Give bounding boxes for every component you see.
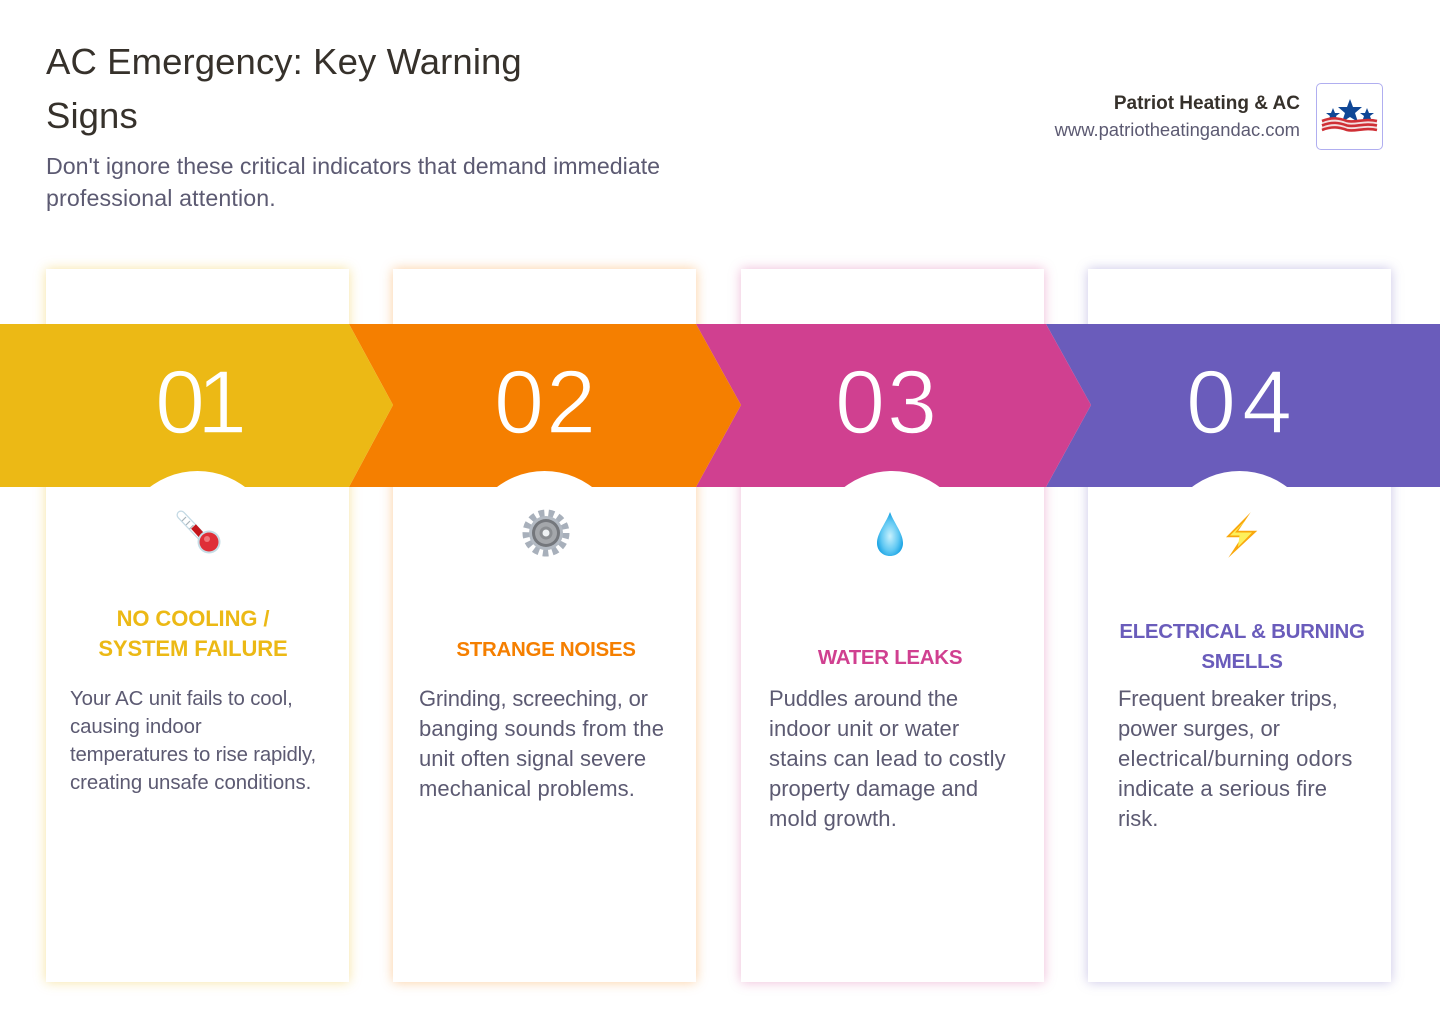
card 4 description: Frequent breaker trips, <box>1118 686 1338 711</box>
card 1 heading: NO COOLING / <box>117 606 269 631</box>
card 1 description: temperatures to rise rapidly, <box>70 744 316 766</box>
company name and website <box>1054 93 1300 140</box>
card 1 description: creating unsafe conditions. <box>70 772 311 794</box>
panel: card 1 background <box>46 269 349 982</box>
number 03: 03 <box>835 353 939 453</box>
card 3 description: mold growth. <box>769 806 897 831</box>
icon: lightning bolt <box>1226 512 1258 558</box>
panel: card 2 background <box>393 269 696 982</box>
card 4 description: indicate a serious fire <box>1118 776 1327 801</box>
card 2 description <box>419 686 664 801</box>
card 2 description: banging sounds from the <box>419 716 664 741</box>
card 1 description: causing indoor <box>70 716 202 738</box>
icon: water drop <box>877 512 903 556</box>
card 1 description <box>70 688 316 794</box>
panel: card 4 background <box>1088 269 1391 982</box>
header: subtitle <box>46 153 660 211</box>
card 1 heading: SYSTEM FAILURE <box>98 636 288 661</box>
number 01: 01 <box>155 353 239 453</box>
card 4 description <box>1118 686 1353 831</box>
card 3 description: Puddles around the <box>769 686 958 711</box>
card 1 heading <box>98 606 288 661</box>
card 4 description: electrical/burning odors <box>1118 746 1353 771</box>
panel: card 3 background <box>741 269 1044 982</box>
icon: thermometer <box>176 510 220 554</box>
header: title: AC Emergency: Key Warning <box>46 41 522 82</box>
card 1 description: Your AC unit fails to cool, <box>70 688 293 710</box>
company name and website: Patriot Heating & AC <box>1114 93 1300 114</box>
card 3 description: indoor unit or water <box>769 716 959 741</box>
card 3 description: property damage and <box>769 776 978 801</box>
card 4 description: power surges, or <box>1118 716 1280 741</box>
header: title <box>46 41 522 136</box>
card 4 heading: SMELLS <box>1201 650 1283 673</box>
header: subtitle: professional attention. <box>46 185 276 211</box>
card 2 description: mechanical problems. <box>419 776 635 801</box>
number 04: 04 <box>1186 353 1298 453</box>
header: subtitle: Don't ignore these critical indicators that demand immediate <box>46 153 660 179</box>
header: title: Signs <box>46 95 138 136</box>
card 2 heading: STRANGE NOISES <box>456 638 636 661</box>
company logo <box>1316 83 1383 150</box>
card 4 heading <box>1119 620 1365 673</box>
card 4 description: risk. <box>1118 806 1158 831</box>
card 2 description: Grinding, screeching, or <box>419 686 648 711</box>
card 3 description <box>769 686 1006 831</box>
card 3 heading: WATER LEAKS <box>818 646 962 669</box>
card 3 description: stains can lead to costly <box>769 746 1006 771</box>
number 02: 02 <box>494 353 598 453</box>
card 4 heading: ELECTRICAL & BURNING <box>1119 620 1365 643</box>
icon: gear <box>522 510 570 556</box>
card 2 description: unit often signal severe <box>419 746 646 771</box>
company name and website: www.patriotheatingandac.com <box>1055 119 1300 140</box>
chevron band with icon notches <box>0 324 1440 487</box>
